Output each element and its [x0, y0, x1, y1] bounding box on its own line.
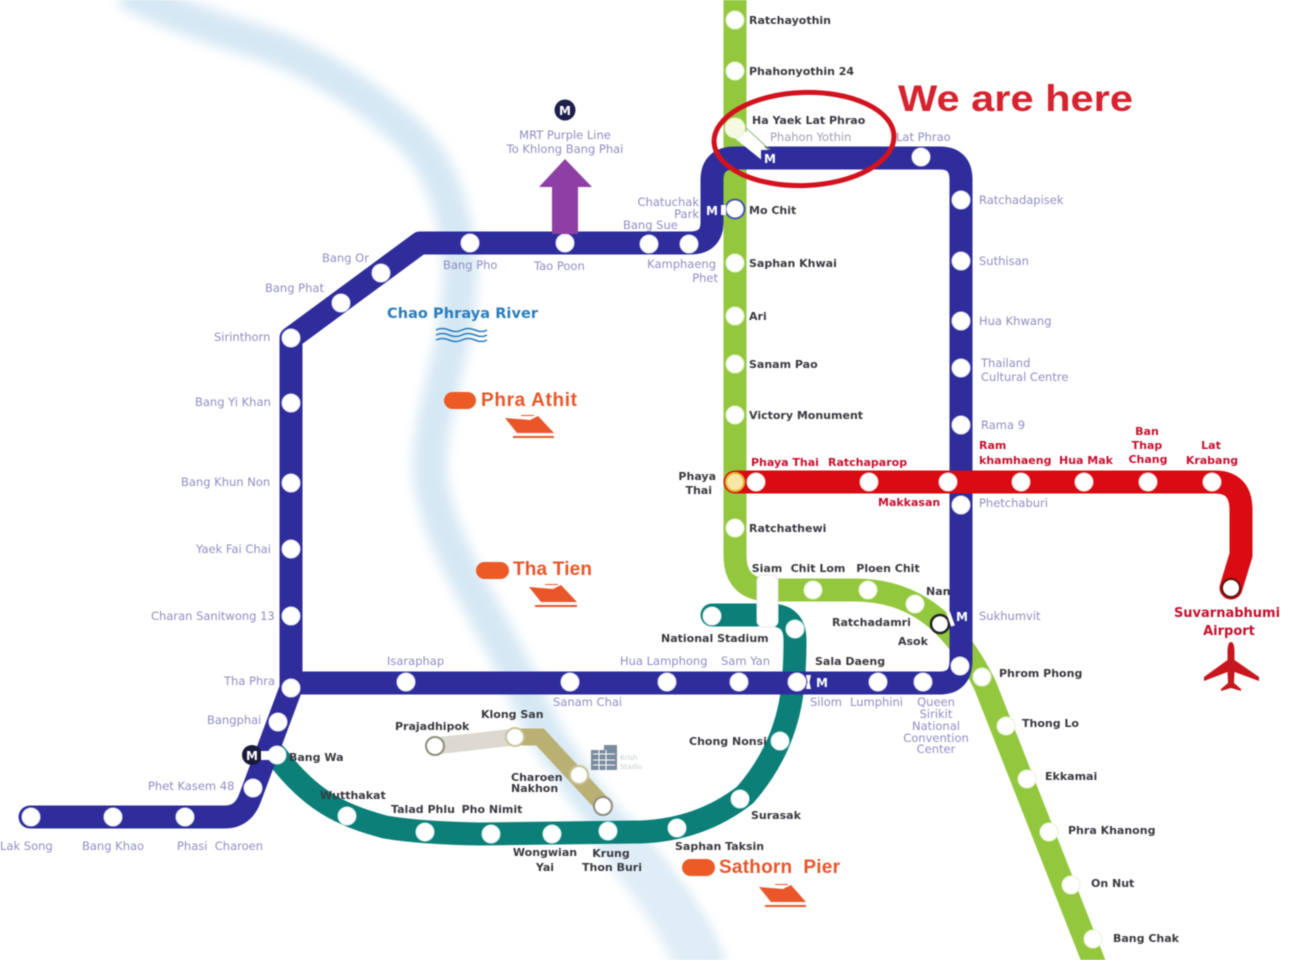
labels: blue line stations: Convention	[903, 731, 969, 745]
labels: teal line stations: Wutthakat	[320, 789, 386, 802]
pier: Tha Tien: Tha Tien	[513, 559, 592, 580]
labels: blue line stations: Lak Song	[0, 839, 53, 853]
labels: teal line stations: Saphan Taksin	[675, 840, 764, 853]
labels: blue line stations: Cultural Centre	[981, 370, 1068, 384]
labels: teal line stations	[289, 632, 885, 874]
labels: green line stations: Ratchayothin	[749, 14, 831, 27]
labels: gold line stations: Nakhon	[511, 782, 558, 795]
labels: red line stations: Lat	[1201, 439, 1221, 452]
station: Phaya Thai interchange	[726, 473, 744, 491]
text: MRT Purple Line destination	[506, 128, 623, 156]
labels: green line stations: Chit Lom	[791, 562, 845, 575]
labels: green line stations: Phahonyothin 24	[749, 65, 854, 78]
labels: red line stations: Ban	[1135, 425, 1159, 438]
labels: blue line stations: Sirikit	[920, 707, 953, 721]
labels: teal line stations: Pho Nimit	[462, 803, 522, 816]
labels: blue line stations: Tha Phra	[223, 674, 275, 688]
labels: green line stations: Ari	[749, 310, 767, 323]
heading: We are here: We are here	[898, 78, 1133, 119]
text: building label: Stadio	[620, 763, 642, 771]
labels: blue line stations: Rama 9	[981, 418, 1025, 432]
labels: red line stations: Airport	[1203, 624, 1255, 639]
labels: green line stations: Siam	[752, 562, 782, 575]
line: gold Gold Line	[515, 737, 603, 805]
pier: Phra Athit: Phra Athit	[481, 390, 578, 411]
labels: teal line stations: Surasak	[751, 809, 802, 822]
river: Chao Phraya	[125, 0, 710, 960]
labels: red line stations: Chang	[1128, 453, 1168, 466]
labels: teal line stations: Talad Phlu	[391, 803, 455, 816]
labels: blue line stations: Phasi Charoen	[177, 839, 263, 853]
line: red Airport Rail Link	[735, 482, 1241, 588]
labels: blue line stations: Thailand	[980, 356, 1030, 370]
line: green Sukhumvit	[735, 0, 1095, 960]
labels: green line stations: Phaya	[678, 470, 716, 483]
labels: green line stations	[678, 14, 1180, 945]
icon: airplane	[1204, 642, 1259, 691]
labels: blue line stations: Hua Lamphong	[620, 654, 708, 668]
text: MRT Purple Line destination: MRT Purple Line	[519, 128, 611, 142]
labels: blue line stations: Bangphai	[207, 713, 261, 727]
labels: red line stations: Ratchaparop	[828, 456, 907, 469]
icon: building	[591, 745, 617, 770]
labels: red line stations	[751, 425, 1280, 639]
connector: Siam interchange	[757, 575, 778, 627]
pier: Phra Athit	[444, 390, 578, 438]
labels: blue line stations: Phet	[692, 271, 718, 285]
labels: blue line stations: Center	[917, 742, 956, 756]
labels: green line stations: On Nut	[1091, 877, 1134, 890]
labels: teal line stations: Wongwian	[513, 846, 577, 859]
labels: blue line stations: Lat Phrao	[896, 130, 951, 144]
labels: blue line stations: Tao Poon	[533, 259, 585, 273]
labels: red line stations: Krabang	[1186, 454, 1238, 467]
labels: red line stations: Phaya Thai	[751, 456, 819, 469]
labels: green line stations: Victory Monument	[749, 409, 863, 422]
labels: green line stations: Saphan Khwai	[749, 257, 837, 270]
connector: Ha Yaek Lat Phrao link	[739, 127, 770, 155]
stations: red line	[747, 473, 1221, 491]
stations: gold line	[426, 728, 612, 815]
icon: MRT Purple Line marker	[554, 100, 576, 120]
labels: red line stations: Makkasan	[878, 496, 940, 509]
labels: teal line stations: National Stadium	[661, 632, 769, 645]
labels: red line stations: khamhaeng	[979, 454, 1051, 467]
labels: green line stations: Phra Khanong	[1068, 824, 1155, 837]
labels: green line stations: Thong Lo	[1022, 717, 1079, 730]
labels: green line stations: Thai	[685, 484, 712, 497]
text: MRT Purple Line destination: To Khlong Bang Phai	[506, 142, 623, 156]
labels: blue line stations: Bang Yi Khan	[195, 395, 271, 409]
labels: green line stations: Ratchadamri	[832, 616, 911, 629]
labels: red line stations: Hua Mak	[1059, 454, 1114, 467]
labels: blue line stations: Phet Kasem 48	[148, 779, 234, 793]
pier: Sathorn Pier	[682, 857, 841, 907]
labels: green line stations: Phrom Phong	[999, 667, 1082, 680]
label: Chao Phraya River: Chao Phraya River	[387, 306, 539, 322]
labels: blue line stations: Bang Khao	[82, 839, 144, 853]
label: Chao Phraya River	[387, 306, 539, 342]
labels: blue line stations: Silom	[810, 695, 842, 709]
labels: blue line stations: Bang Khun Non	[181, 475, 270, 489]
stations: teal line	[338, 607, 804, 843]
interchange marker M: Tao Poon / Bang Wa	[242, 745, 269, 765]
interchange marker M: Si Lom	[806, 675, 828, 690]
labels: teal line stations: Krung	[592, 847, 630, 860]
labels: gold line stations: Charoen	[511, 771, 563, 784]
labels: blue line stations: Phetchaburi	[979, 496, 1048, 510]
labels: blue line stations: Sanam Chai	[553, 695, 622, 709]
labels: blue line stations: Lumphini	[850, 695, 903, 709]
labels: blue line stations: Kamphaeng	[647, 257, 716, 271]
labels: teal line stations: Bang Wa	[289, 751, 344, 764]
labels: blue line stations: National	[912, 719, 960, 733]
line: gold Prajadhipok segment	[435, 737, 515, 746]
labels: red line stations: Thap	[1132, 439, 1162, 452]
stations: green line	[725, 11, 1102, 948]
stations: blue line	[22, 148, 970, 826]
labels: blue line stations: Yaek Fai Chai	[195, 542, 271, 556]
labels: blue line stations: Park	[674, 207, 699, 221]
labels: blue line stations: Isaraphap	[387, 654, 444, 668]
labels: green line stations: Ratchathewi	[749, 522, 826, 535]
interchange marker M: Sukhumvit	[948, 608, 971, 626]
station: Sala Daeng interchange	[788, 673, 806, 691]
labels: red line stations: Ram	[979, 439, 1006, 452]
labels: green line stations: Mo Chit	[749, 204, 796, 217]
labels: green line stations: Ha Yaek Lat Phrao	[752, 114, 866, 127]
interchange marker M: Si Lom: M	[816, 676, 828, 690]
labels: blue line stations: Charan Sanitwong 13	[151, 609, 275, 623]
labels: blue line stations: Ratchadapisek	[979, 193, 1064, 207]
labels: gold line stations: Klong San	[481, 708, 544, 721]
interchange marker M: Phahon Yothin: M	[764, 152, 776, 166]
labels: red line stations: Suvarnabhumi	[1174, 606, 1280, 621]
labels: blue line stations: Suthisan	[979, 254, 1029, 268]
labels: blue line stations: Chatuchak	[638, 195, 699, 209]
interchange marker M: Chatuchak	[704, 202, 726, 218]
interchange marker M: Phahon Yothin	[761, 150, 778, 166]
labels: green line stations: Bang Chak	[1113, 932, 1180, 945]
labels: blue line stations: Bang Sue	[623, 218, 678, 232]
labels: green line stations: Asok	[898, 635, 929, 648]
labels: blue line stations: Sam Yan	[721, 654, 770, 668]
labels: green line stations: Sanam Pao	[749, 358, 818, 371]
labels: blue line stations: Hua Khwang	[979, 314, 1052, 328]
labels: blue line stations: Sirinthorn	[214, 330, 270, 344]
labels: green line stations: Ekkamai	[1045, 770, 1097, 783]
labels: blue line stations: Phahon Yothin	[770, 130, 851, 144]
interchange marker M: Sukhumvit: M	[956, 610, 968, 624]
label: Nana, partly hidden by the blue line: Nana	[926, 585, 958, 598]
labels: gold line stations	[395, 708, 563, 795]
station: Bang Wa interchange	[268, 746, 286, 764]
arrow: Purple Line up	[539, 159, 592, 234]
labels: gold line stations: Prajadhipok	[395, 720, 470, 733]
pier: Tha Tien	[476, 559, 592, 607]
station: Mo Chit interchange	[726, 200, 744, 218]
callout: red ellipse	[712, 89, 896, 189]
labels: teal line stations: Yai	[535, 861, 554, 874]
labels: blue line stations: Bang Or	[322, 251, 369, 265]
line: blue MRT	[30, 158, 961, 817]
labels: green line stations: Ploen Chit	[856, 562, 920, 575]
station: Suvarnabhumi terminal	[1222, 579, 1240, 597]
icon: MRT Purple Line marker: M	[559, 104, 571, 118]
pier: Sathorn Pier: Sathorn Pier	[719, 857, 841, 878]
labels: blue line stations: Bang Pho	[443, 258, 497, 272]
text: building label: Krish	[620, 754, 638, 762]
station: Asok interchange	[931, 615, 949, 633]
labels: teal line stations: Sala Daeng	[815, 655, 885, 668]
labels: teal line stations: Thon Buri	[582, 861, 642, 874]
labels: teal line stations: Chong Nonsi	[689, 735, 767, 748]
labels: blue line stations	[0, 130, 1068, 853]
line: teal Silom	[276, 615, 795, 834]
interchange marker M: Chatuchak: M	[706, 204, 718, 218]
text: building label	[620, 754, 642, 771]
river: lower widening	[610, 830, 700, 960]
interchange marker M: Tao Poon / Bang Wa: M	[246, 749, 258, 763]
labels: blue line stations: Bang Phat	[265, 281, 324, 295]
labels: blue line stations: Sukhumvit	[979, 609, 1041, 623]
labels: blue line stations: Queen	[917, 695, 955, 709]
